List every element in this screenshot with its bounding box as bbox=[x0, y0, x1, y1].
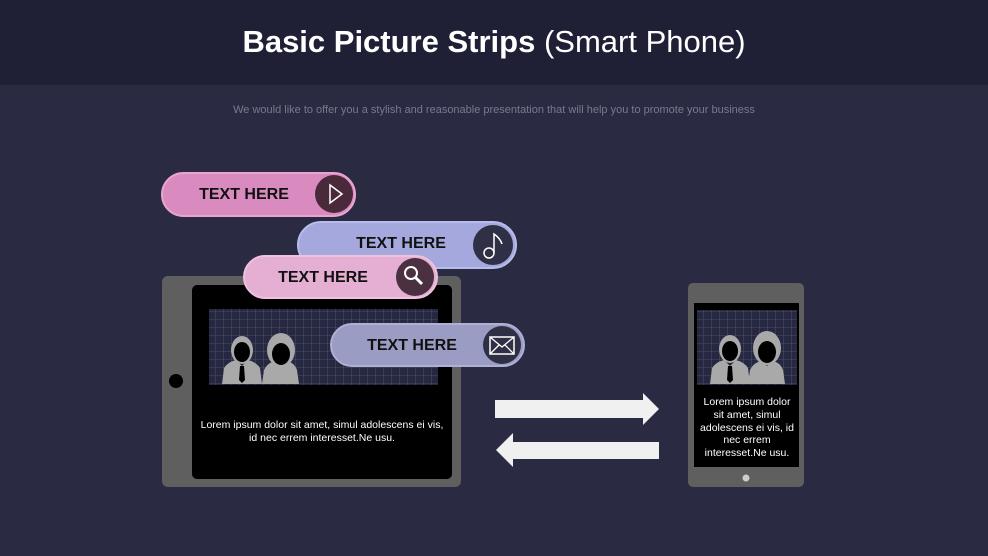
pill 1: play: TEXT HERE bbox=[199, 186, 289, 203]
header band bbox=[0, 0, 988, 85]
pill 2: music: TEXT HERE bbox=[356, 235, 446, 252]
tablet device bbox=[162, 276, 461, 487]
phone text: interesset.Ne usu. bbox=[705, 447, 789, 459]
pill 2: music bbox=[298, 222, 516, 268]
tablet device: id nec errem interesset.Ne usu. bbox=[249, 432, 395, 444]
subtitle: We would like to offer you a stylish and reasonable presentation that will help you to promote your business bbox=[233, 104, 755, 116]
pill 1: play bbox=[162, 173, 355, 216]
phone text: sit amet, simul bbox=[713, 409, 781, 421]
arrow right bbox=[495, 393, 659, 425]
tablet picture: people bbox=[209, 309, 438, 385]
pill 3: search: TEXT HERE bbox=[278, 269, 368, 286]
phone text: adolescens ei vis, id bbox=[700, 422, 794, 434]
phone picture: people bbox=[697, 310, 797, 385]
phone text bbox=[700, 396, 794, 459]
pill 4: mail bbox=[331, 324, 524, 366]
tablet text: Lorem ipsum dolor sit amet, simul adolescens ei vis, bbox=[201, 419, 443, 431]
phone text: Lorem ipsum dolor bbox=[704, 396, 791, 408]
pill 3: search bbox=[244, 256, 437, 298]
arrow left bbox=[496, 433, 659, 467]
pill 4: mail: TEXT HERE bbox=[367, 337, 457, 354]
phone text: nec errem bbox=[723, 434, 771, 446]
smartphone device bbox=[688, 283, 804, 487]
title: Basic Picture Strips (Smart Phone) bbox=[242, 24, 746, 59]
